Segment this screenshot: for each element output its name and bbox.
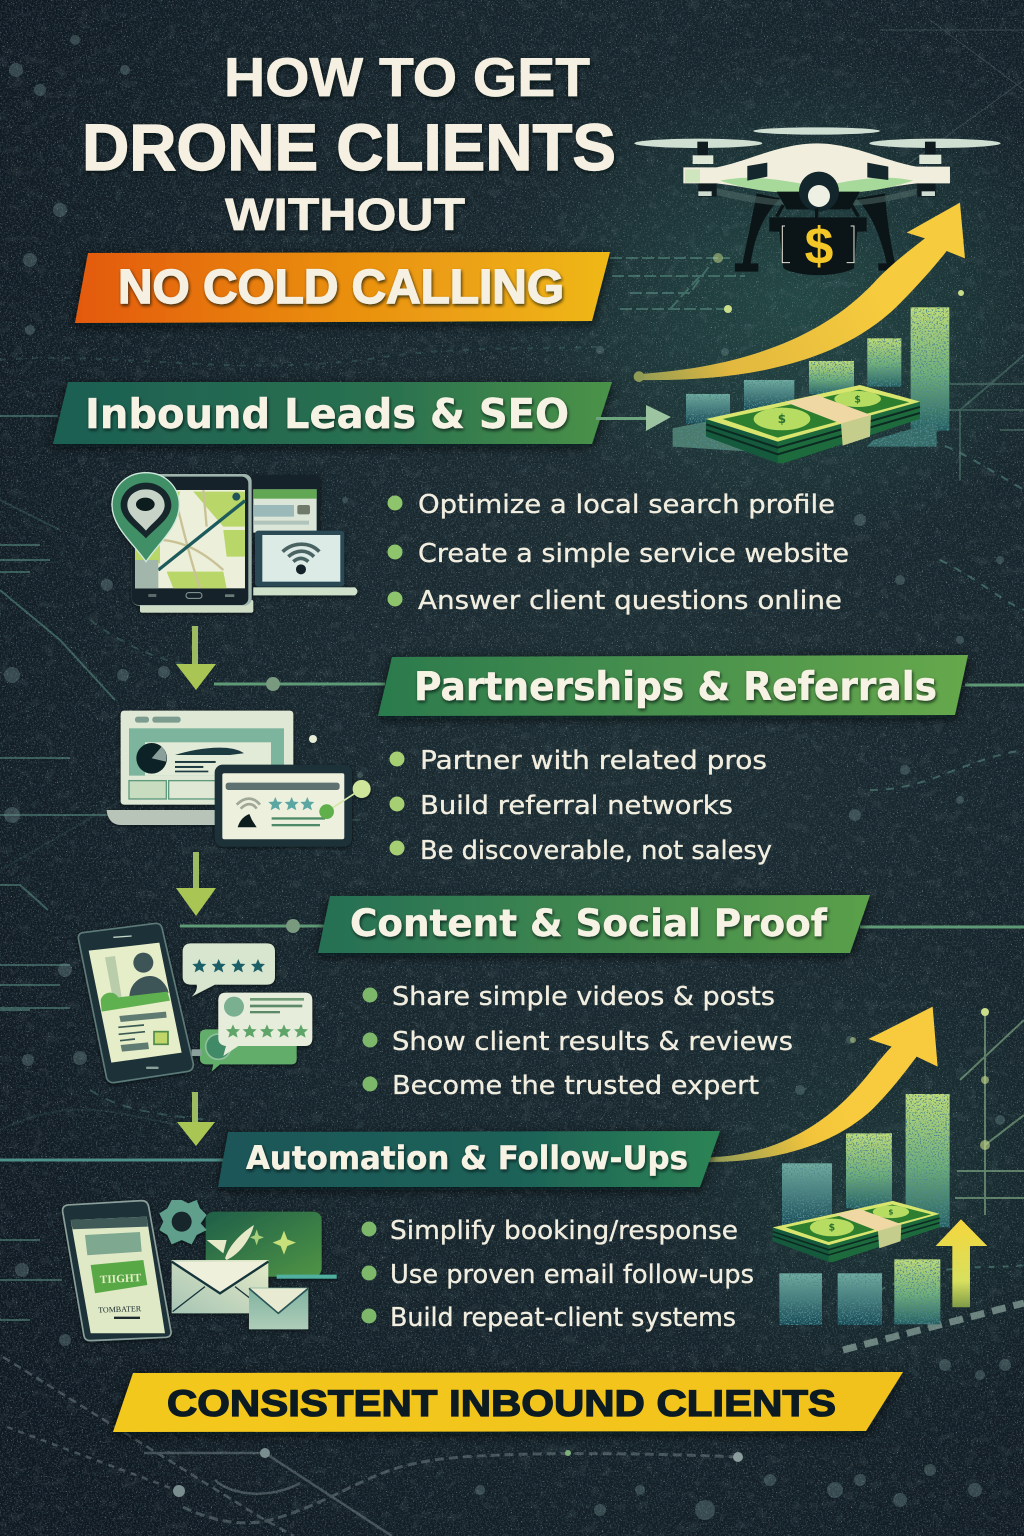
banner: no cold calling: NO COLD CALLING [118,261,564,314]
heading: inbound leads and seo [53,382,612,444]
bullets: partnerships: Build referral networks [420,791,733,821]
title [82,46,616,240]
heading: automation and follow-ups [0,1131,720,1187]
cash stack [706,385,920,463]
bullets: inbound leads: Create a simple service website [418,539,849,569]
bullets: inbound leads: Optimize a local search profile [418,490,835,520]
bullets: automation [362,1216,754,1333]
heading: automation and follow-ups: Automation & Follow-Ups [246,1139,688,1177]
banner: consistent inbound clients: CONSISTENT INBOUND CLIENTS [167,1383,836,1424]
title: WITHOUT [225,189,465,240]
heading: content and social proof [180,895,1024,953]
bullets: partnerships [390,746,772,866]
bullets: content: Become the trusted expert [392,1071,759,1101]
banner: no cold calling [75,252,610,323]
bars [779,1094,950,1325]
title: HOW TO GET [224,46,590,108]
drone legs [717,188,917,272]
money box [769,205,867,275]
money box: $ [805,216,833,274]
bullets: inbound leads [388,490,849,616]
bullets: automation: Build repeat-client systems [390,1303,736,1333]
bullets: content: Share simple videos & posts [392,982,775,1012]
bullets: inbound leads: Answer client questions online [418,586,842,616]
icon: phone, gear and email [63,1200,337,1341]
heading: content and social proof: Content & Social Proof [350,902,828,945]
drone body [683,142,950,212]
bullets: content [362,982,793,1101]
heading: partnerships and referrals: Partnerships & Referrals [414,665,937,710]
heading: partnerships and referrals [214,655,1024,716]
growth bars [673,307,949,453]
icon: phone with review bubbles [78,923,312,1083]
bullets: partnerships: Be discoverable, not salesy [420,836,772,866]
arrow: down 1 [176,626,216,690]
icon: phone, gear and email: TIIGHT [100,1272,142,1286]
bullets: automation: Simplify booking/response [390,1216,738,1246]
rising arrow [634,203,965,382]
arrow: down 3 [177,1092,215,1146]
arrow: down 2 [176,852,216,916]
cash stack [773,1201,940,1262]
icon: laptop and review tablet [107,711,371,847]
icon: map pin on tablet with laptop [112,473,357,613]
propellers [634,127,1001,148]
bullets: automation: Use proven email follow-ups [390,1260,754,1290]
icon: phone, gear and email: TOMBATER [98,1304,142,1315]
illustration: drone carrying money [634,127,1001,463]
heading: inbound leads and seo: Inbound Leads & SEO [85,390,569,438]
title: DRONE CLIENTS [82,110,616,184]
up arrow [936,1219,987,1307]
rising arrow [707,1007,938,1162]
bullets: partnerships: Partner with related pros [420,746,767,776]
chart: growth bars with cash and arrows [707,1007,987,1325]
bullets: content: Show client results & reviews [392,1027,793,1057]
arrow: to money [596,405,671,431]
banner: consistent inbound clients [113,1372,903,1432]
